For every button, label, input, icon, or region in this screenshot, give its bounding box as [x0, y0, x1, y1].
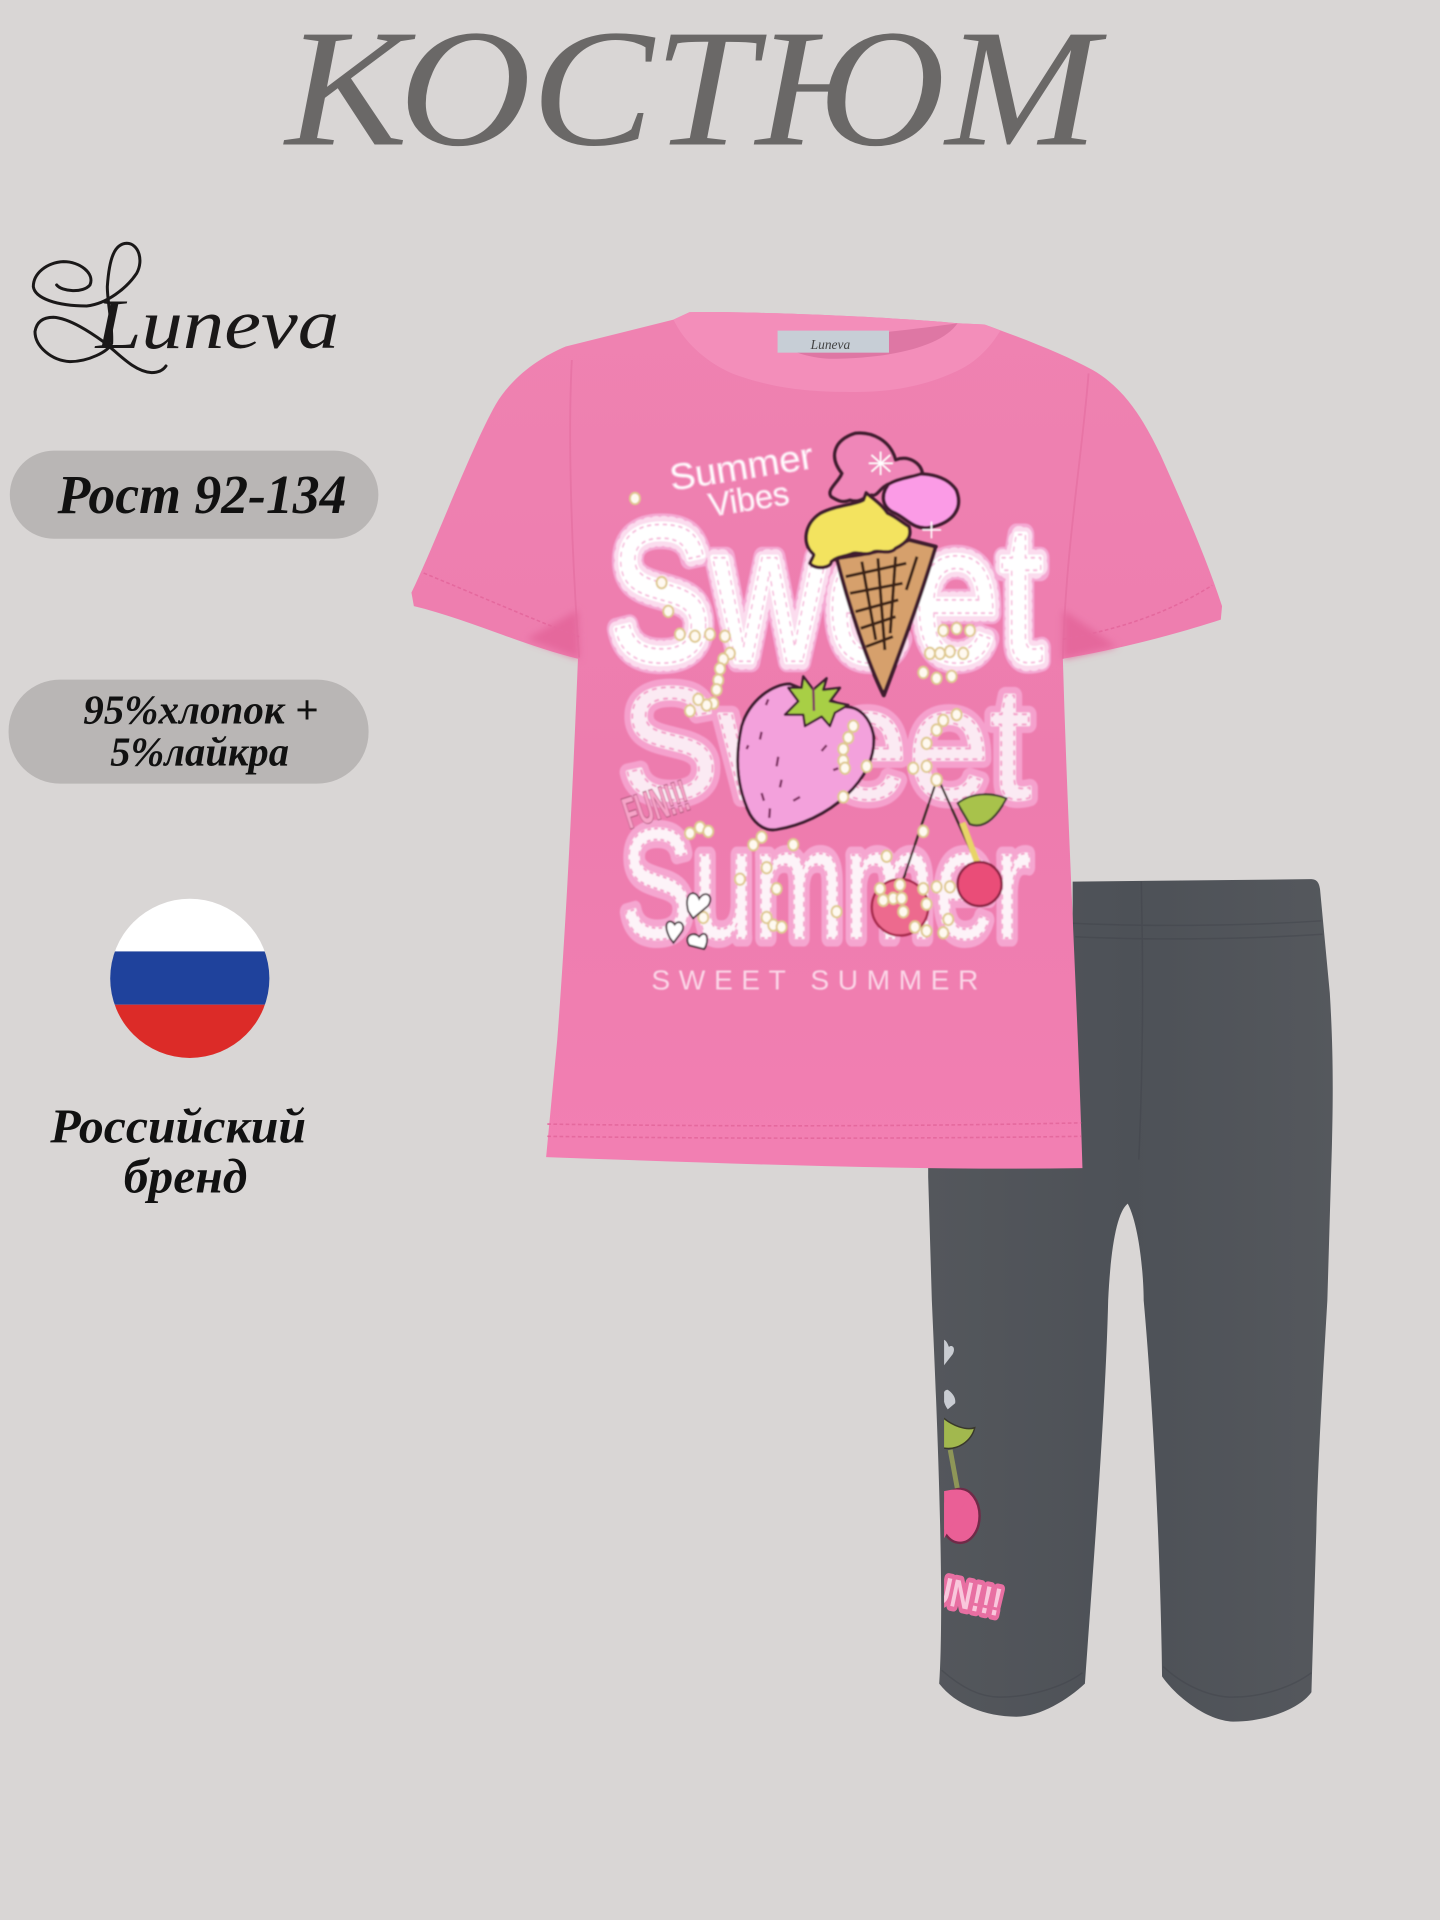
pill: fabric composition: 95%хлопок +	[83, 688, 318, 734]
print: Summer Vibes	[667, 435, 821, 530]
print: Sweet Sweet Summer lettering: Summer	[621, 797, 1031, 972]
print: Sweet Sweet Summer lettering: Sweet	[609, 484, 1043, 703]
sleeve seams and underarm shading	[527, 610, 1117, 659]
collar label	[778, 331, 889, 353]
print: Sweet Sweet Summer lettering: Sweet	[609, 484, 1043, 703]
print: Sweet Sweet Summer lettering	[609, 484, 1043, 972]
pink scoop	[830, 433, 922, 501]
print: Summer Vibes: Vibes	[706, 475, 792, 525]
neck opening	[779, 323, 958, 359]
t-shirt	[411, 312, 1222, 1169]
print artwork	[609, 433, 1043, 995]
title: КОСТЮМ	[283, 0, 1107, 181]
print: Sweet Sweet Summer lettering: Summer	[621, 797, 1031, 972]
print: Sweet Sweet Summer lettering: Sweet	[621, 654, 1031, 832]
print: Sweet Sweet Summer lettering: Sweet	[621, 654, 1031, 832]
pill: height range	[10, 451, 378, 539]
print: leaf	[944, 1418, 976, 1450]
collar band	[673, 312, 1000, 392]
icon: Russian flag	[110, 898, 270, 1058]
collar label: Luneva	[810, 337, 850, 352]
print: FUN: FUN!!!	[617, 771, 695, 838]
pill: fabric composition	[9, 680, 369, 784]
print: strawberry	[738, 676, 874, 830]
cuff and hem stitching	[424, 573, 1212, 1138]
pill: height range: Рост 92-134	[57, 464, 347, 525]
print: cherries	[872, 784, 1007, 936]
print: FUN sticker: FUN!!!	[908, 1564, 1005, 1625]
brand caption: бренд	[124, 1149, 247, 1204]
leggings	[908, 879, 1333, 1722]
brand caption	[49, 1098, 306, 1204]
print: Sweet Sweet Summer lettering: Sweet	[609, 484, 1043, 703]
lavender scoop	[883, 474, 958, 528]
pill: fabric composition: 5%лайкра	[110, 729, 289, 775]
logo: Luneva: Luneva	[94, 286, 339, 364]
print: Sweet Sweet Summer lettering: Sweet	[621, 654, 1031, 832]
shirt body	[411, 312, 1222, 1169]
print: cherry	[940, 1489, 980, 1543]
print: ice cream	[806, 433, 958, 695]
print: sequins	[630, 493, 975, 938]
leggings print	[944, 1340, 1005, 1620]
print: SWEET SUMMER caption: SWEET SUMMER	[651, 964, 986, 995]
print: Sweet Sweet Summer lettering: Sweet	[609, 484, 1043, 703]
logo: Luneva	[33, 243, 339, 373]
print: hearts	[944, 1340, 956, 1410]
print: Summer Vibes: Summer	[667, 435, 816, 498]
print: Sweet Sweet Summer lettering: Summer	[621, 797, 1031, 972]
yellow scoop	[806, 493, 910, 568]
ice cream cone	[837, 540, 936, 695]
sparkles	[869, 452, 941, 538]
brand caption: Российский	[49, 1098, 306, 1153]
leggings hem stitching and waistband	[942, 882, 1322, 1697]
print: hearts	[666, 893, 710, 949]
